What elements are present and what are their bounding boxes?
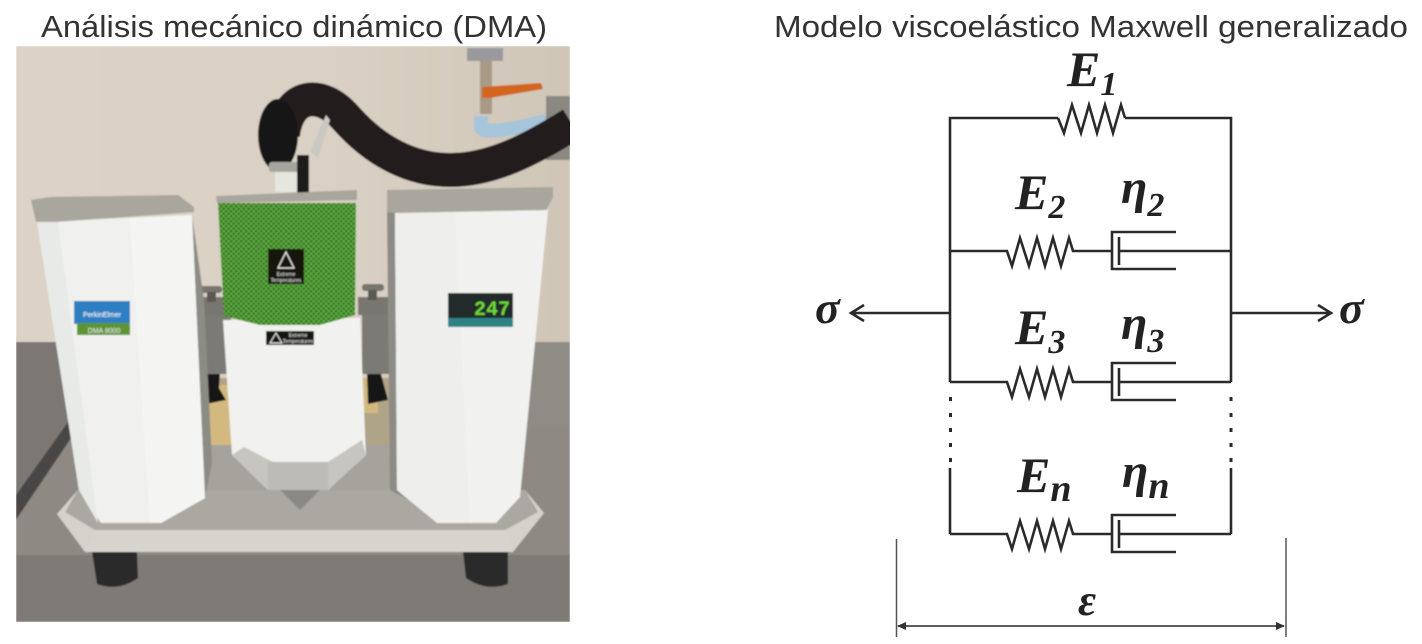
display: temperature controller bbox=[448, 293, 513, 327]
display: temperature controller: 247 bbox=[474, 299, 510, 322]
label: extreme temperatures (body): Temperatures bbox=[283, 339, 314, 345]
label: eta3: 3 bbox=[1146, 323, 1164, 360]
label: PerkinElmer DMA 8000: PerkinElmer bbox=[83, 312, 122, 319]
arrow: left stress bbox=[851, 305, 950, 321]
label: eta2: 2 bbox=[1146, 187, 1164, 224]
label: E2: 2 bbox=[1047, 189, 1065, 226]
label: E3: E bbox=[1015, 299, 1048, 355]
label: epsilon: ε bbox=[1078, 576, 1096, 625]
label: eta3: η bbox=[1121, 297, 1147, 350]
base plate bbox=[57, 490, 544, 552]
label: E1: E bbox=[1067, 41, 1100, 97]
gap behind center with wood bbox=[218, 378, 390, 446]
label: PerkinElmer DMA 8000: DMA 8000 bbox=[88, 328, 120, 335]
strain dimension bracket bbox=[896, 538, 1286, 637]
label: eta2: η bbox=[1121, 161, 1147, 214]
branch n: spring and dashpot bbox=[950, 515, 1231, 552]
wall/counter/floor background bbox=[16, 342, 76, 442]
label: E3: 3 bbox=[1047, 324, 1065, 361]
label: etan: η bbox=[1122, 445, 1148, 498]
branch 2: spring and dashpot bbox=[950, 232, 1231, 269]
label: sigma right: σ bbox=[1339, 282, 1365, 333]
label: etan: n bbox=[1148, 465, 1169, 507]
right column bbox=[387, 212, 408, 500]
frame wires bbox=[950, 118, 1231, 534]
label: E1: 1 bbox=[1100, 66, 1117, 103]
hose bbox=[283, 99, 572, 170]
title: Modelo viscoelástico Maxwell generalizado: Modelo viscoelástico Maxwell generalizado bbox=[774, 9, 1408, 44]
dotted continuation bbox=[949, 397, 1232, 462]
label: extreme temperatures (body) bbox=[266, 331, 314, 345]
label: En: E bbox=[1017, 447, 1050, 503]
photo: DMA instrument bbox=[16, 46, 572, 622]
side frames and knobs bbox=[204, 314, 232, 376]
pipe and valve bbox=[480, 58, 492, 114]
label: En: n bbox=[1050, 468, 1072, 510]
title: Análisis mecánico dinámico: Análisis mecánico dinámico (DMA) bbox=[41, 9, 547, 44]
spring E1 bbox=[1058, 105, 1125, 133]
left column bbox=[192, 218, 212, 494]
label: E2: E bbox=[1015, 164, 1048, 220]
feet bbox=[92, 552, 138, 587]
arrow: right stress bbox=[1231, 305, 1331, 321]
center column bbox=[222, 317, 367, 463]
label: PerkinElmer DMA 8000 bbox=[74, 301, 130, 335]
label: extreme temperatures (body): Extreme bbox=[289, 333, 308, 339]
label: extreme temperatures (mesh): Temperatures bbox=[271, 278, 302, 284]
label: extreme temperatures (mesh): Extreme bbox=[277, 272, 296, 278]
label: sigma left: σ bbox=[815, 282, 841, 333]
branch 3: spring and dashpot bbox=[950, 363, 1231, 400]
label: extreme temperatures (mesh) bbox=[268, 249, 304, 284]
diagram: generalized Maxwell model bbox=[815, 41, 1365, 637]
